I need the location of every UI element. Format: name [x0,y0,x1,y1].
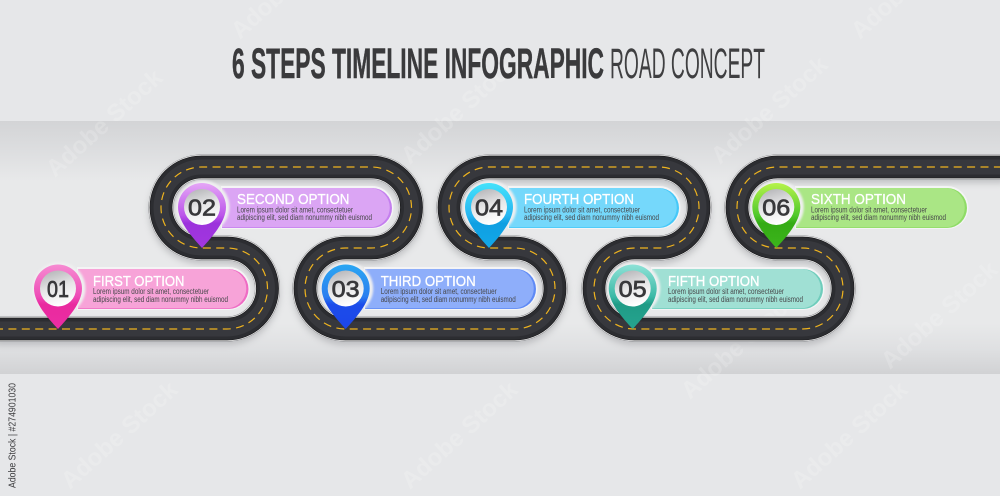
heading: first option: FIRST OPTION [93,273,184,290]
body text: fourth option: Lorem ipsum dolor sit amet, consectetuer [524,205,640,214]
body text: first option: Lorem ipsum dolor sit amet, consectetuer [93,287,209,296]
body text: second option: Lorem ipsum dolor sit amet, consectetuer [237,205,353,214]
pin 02 [176,180,230,248]
watermarks: Adobe Stock [786,376,914,494]
step 3: third option [320,262,536,329]
body text: first option: adipiscing elit, sed diam nonummy nibh euismod [93,295,228,304]
heading: sixth option: SIXTH OPTION [811,191,906,208]
watermarks: Adobe Stock [876,256,1000,374]
body text: first option [93,287,228,304]
pin 04: 04 [475,194,503,220]
heading: fifth option: FIFTH OPTION [668,273,760,290]
winding road [0,167,1000,333]
pin 01 [32,262,86,329]
body text: fifth option: adipiscing elit, sed diam nonummy nibh euismod [668,295,803,304]
pin 04 [464,180,516,248]
body text: fifth option [668,287,803,304]
heading: fourth option: FOURTH OPTION [524,191,634,208]
body text: fourth option [524,205,659,222]
step 6: sixth option [751,180,968,248]
pin 06: 06 [762,194,790,220]
heading: third option: THIRD OPTION [381,273,476,290]
watermarks: Adobe Stock [396,51,524,169]
step 4: fourth option [464,180,679,248]
step 2: second option [176,180,392,248]
body text: sixth option: Lorem ipsum dolor sit amet, consectetuer [811,205,927,214]
body text: second option [237,205,372,222]
watermarks: Adobe Stock [396,376,524,494]
step 1: first option [32,262,249,329]
body text: third option [381,287,516,304]
pin 03: 03 [332,276,360,302]
stock id caption: Adobe Stock | #274901030 [6,383,18,488]
title: 6 STEPS TIMELINE INFOGRAPHIC [232,40,604,88]
pin 03 [320,262,373,329]
watermarks: Adobe Stock [56,376,184,494]
pin 01: 01 [47,276,69,302]
road band backdrop [0,121,1000,374]
body text: fourth option: adipiscing elit, sed diam nonummy nibh euismod [524,213,659,222]
body text: second option: adipiscing elit, sed diam nonummy nibh euismod [237,213,372,222]
text: ROAD CONCEPT [610,40,765,88]
pin 02: 02 [188,194,216,220]
pin 05 [607,262,660,329]
body text: third option: Lorem ipsum dolor sit amet, consectetuer [381,287,497,296]
watermarks: Adobe Stock [41,64,169,182]
pin 05: 05 [619,276,647,302]
body text: sixth option: adipiscing elit, sed diam nonummy nibh euismod [811,213,946,222]
watermarks: Adobe Stock [676,286,804,404]
heading: second option: SECOND OPTION [237,191,350,208]
step 5: fifth option [607,262,823,329]
pin 06 [751,180,804,248]
body text: sixth option [811,205,946,222]
body text: third option: adipiscing elit, sed diam nonummy nibh euismod [381,295,516,304]
body text: fifth option: Lorem ipsum dolor sit amet, consectetuer [668,287,784,296]
watermarks: Adobe Stock [706,51,834,169]
